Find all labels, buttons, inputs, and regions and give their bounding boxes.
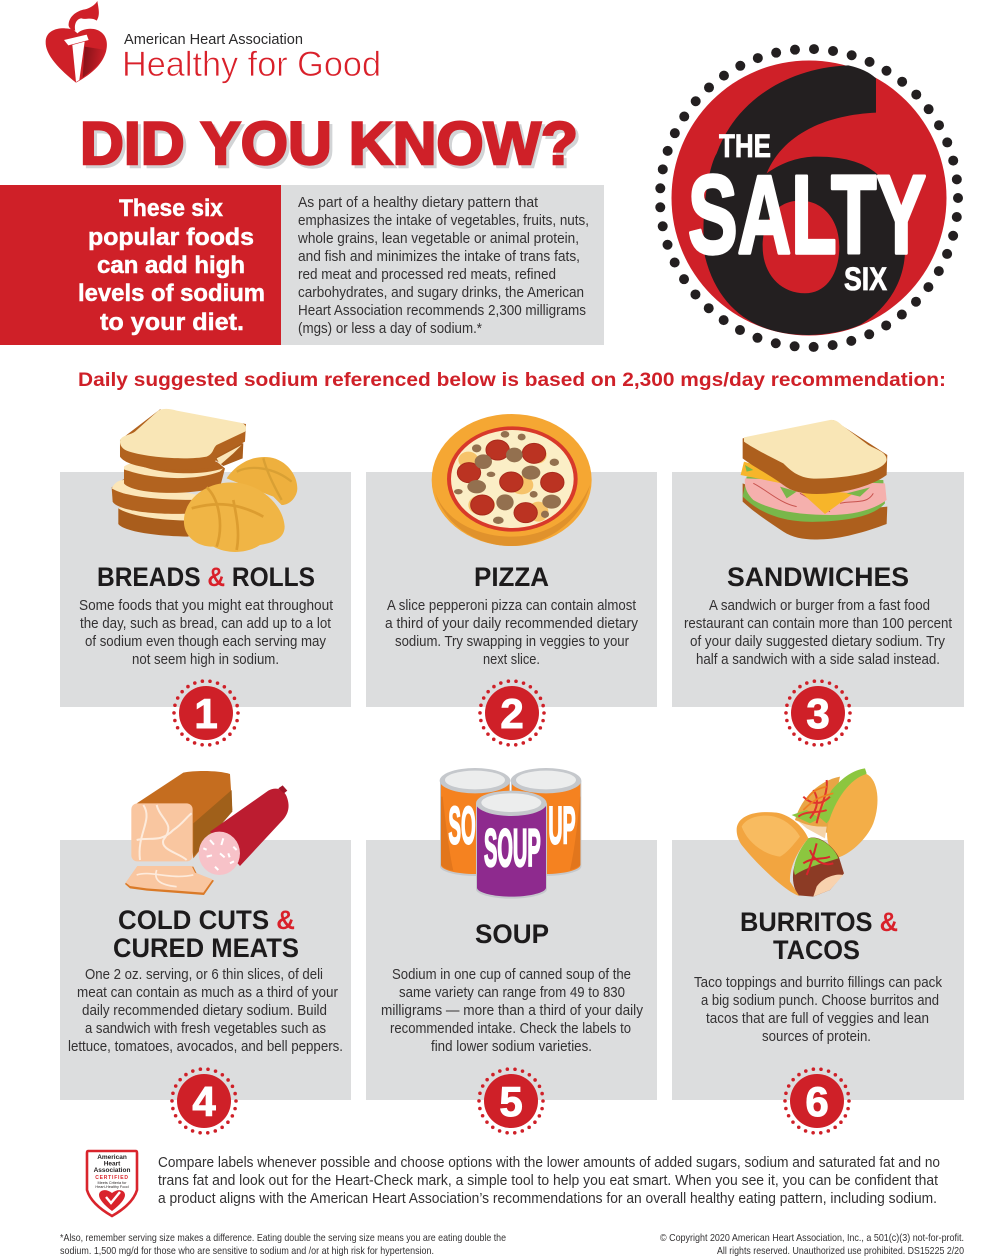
panel: intro text: emphasizes the intake of vegetables, fruits, nuts, bbox=[298, 212, 589, 229]
panel: red callout: to your diet. bbox=[100, 309, 244, 336]
badge: the salty six: SIX bbox=[844, 261, 888, 297]
heading: sandwiches: SANDWICHES bbox=[727, 562, 909, 592]
heading: cold cuts: CURED MEATS bbox=[113, 933, 299, 963]
text: pizza body: sodium. Try swapping in veggies to your bbox=[395, 633, 629, 650]
text: compare labels note: trans fat and look out for the Heart-Check mark, a simple tool to help you eat smart. When you see it, you can be confident that bbox=[158, 1172, 939, 1189]
text: soup body bbox=[381, 966, 643, 1055]
panel: intro text: (mgs) or less a day of sodium.* bbox=[298, 320, 482, 337]
icon: heart-check certification mark: Meets Criteria for bbox=[97, 1181, 127, 1185]
text: compare labels note: Compare labels whenever possible and choose options with the lower amounts of added sugars, sodium and saturated fat and no bbox=[158, 1154, 940, 1171]
text: cold cuts body: One 2 oz. serving, or 6 thin slices, of deli bbox=[85, 966, 323, 983]
panel: intro text: and fish and minimizes the intake of trans fats, bbox=[298, 248, 580, 265]
text: footnote bbox=[60, 1232, 506, 1257]
illustration: burrito and taco bbox=[737, 768, 877, 897]
heading: burritos and tacos: TACOS bbox=[773, 935, 860, 965]
icon: heart-check certification mark bbox=[87, 1151, 137, 1216]
text: copyright bbox=[660, 1232, 964, 1257]
text: burritos body: a big sodium punch. Choose burritos and bbox=[701, 992, 939, 1009]
text: sandwiches body: restaurant can contain more than 100 percent bbox=[684, 615, 953, 632]
text: breads body: of sodium even though each serving may bbox=[85, 633, 326, 650]
text: soup body: milligrams — more than a third of your daily bbox=[381, 1002, 643, 1019]
heading: pizza: PIZZA bbox=[474, 562, 549, 592]
panel: sandwiches bbox=[672, 472, 964, 707]
heading: burritos and tacos bbox=[740, 907, 898, 965]
text: breads body: Some foods that you might eat throughout bbox=[79, 597, 334, 614]
text: cold cuts body: lettuce, tomatoes, avocados, and bell peppers. bbox=[68, 1038, 343, 1055]
icon: heart-check certification mark: American bbox=[97, 1154, 127, 1161]
panel: red callout: popular foods bbox=[88, 224, 254, 251]
text: sandwiches body: A sandwich or burger from a fast food bbox=[709, 597, 930, 614]
text: burritos body bbox=[694, 974, 942, 1045]
text: burritos body: tacos that are full of veggies and lean bbox=[706, 1010, 929, 1027]
text: compare labels note: a product aligns with the American Heart Association’s recommendations for an overall healthy eating pattern, including sodium. bbox=[158, 1190, 937, 1207]
text: soup body: recommended intake. Check the labels to bbox=[390, 1020, 631, 1037]
subheading: daily suggested sodium: Daily suggested sodium referenced below is based on 2,300 mgs/day recommendation: bbox=[78, 370, 946, 391]
panel: pizza bbox=[366, 472, 657, 707]
illustration: soup cans: SO bbox=[448, 796, 476, 855]
text: cold cuts body bbox=[68, 966, 343, 1055]
heading: cold cuts bbox=[113, 905, 299, 963]
number badge 1 bbox=[174, 681, 238, 745]
panel: soup bbox=[366, 840, 657, 1100]
text: UP bbox=[548, 796, 576, 855]
text: pizza body bbox=[385, 597, 638, 668]
text: sandwiches body: of your daily suggested dietary sodium. Try bbox=[690, 633, 945, 650]
panel: intro text: As part of a healthy dietary pattern that bbox=[298, 194, 539, 211]
panel: cold cuts and cured meats bbox=[60, 840, 351, 1100]
panel: red callout: levels of sodium bbox=[78, 280, 265, 307]
text: cold cuts body: daily recommended dietary sodium. Build bbox=[82, 1002, 327, 1019]
text: burritos body: Taco toppings and burrito fillings can pack bbox=[694, 974, 942, 991]
number badge 6 bbox=[785, 1069, 849, 1133]
organisation name: American Heart Association bbox=[124, 32, 303, 48]
panel: intro text: Heart Association recommends 2,300 milligrams bbox=[298, 302, 586, 319]
icon: heart-check certification mark: CERTIFIED bbox=[95, 1175, 129, 1181]
illustration: cold cuts and salami bbox=[125, 771, 289, 895]
number badge 2 bbox=[480, 681, 544, 745]
logo: American Heart Association Healthy for Good bbox=[46, 1, 381, 84]
badge: the salty six: THE bbox=[719, 128, 771, 164]
text: soup body: same variety can range from 49 to 830 bbox=[399, 984, 625, 1001]
text: footnote: sodium. 1,500 mg/d for those who are sensitive to sodium and /or at high risk for hypertension. bbox=[60, 1245, 434, 1257]
heading: cold cuts: COLD CUTS & bbox=[118, 905, 295, 935]
tagline: Healthy for Good bbox=[122, 45, 381, 84]
panel: red callout: can add high bbox=[97, 252, 245, 279]
text: pizza body: a third of your daily recommended dietary bbox=[385, 615, 638, 632]
illustration: bread and rolls bbox=[112, 409, 297, 552]
text: pizza body: A slice pepperoni pizza can contain almost bbox=[387, 597, 637, 614]
number badge 5: 5 bbox=[499, 1078, 523, 1125]
text: breads body: the day, such as bread, can add up to a lot bbox=[80, 615, 332, 632]
number badge 3 bbox=[786, 681, 850, 745]
number badge 5 bbox=[479, 1069, 543, 1133]
panel: breads and rolls bbox=[60, 472, 351, 707]
icon: heart-check certification mark: Heart bbox=[104, 1160, 121, 1168]
text: footnote: *Also, remember serving size makes a difference. Eating double the serving size means you are eating double the bbox=[60, 1232, 506, 1244]
heading: soup: SOUP bbox=[475, 919, 549, 949]
text: sandwiches body bbox=[684, 597, 953, 668]
illustration: pepperoni pizza bbox=[432, 414, 592, 546]
heading: breads and rolls: BREADS & ROLLS bbox=[97, 562, 315, 592]
number badge 3: 3 bbox=[806, 690, 830, 737]
number badge 2: 2 bbox=[500, 690, 524, 737]
text: breads body bbox=[79, 597, 334, 668]
number badge 6: 6 bbox=[805, 1078, 829, 1125]
text: breads body: not seem high in sodium. bbox=[132, 651, 279, 668]
text: cold cuts body: a sandwich with fresh vegetables such as bbox=[85, 1020, 326, 1037]
heading: burritos and tacos: BURRITOS & bbox=[740, 907, 898, 937]
text: cold cuts body: meat can contain as much as a third of your bbox=[77, 984, 338, 1001]
number badge 4: 4 bbox=[192, 1078, 216, 1125]
badge: the salty six bbox=[660, 49, 958, 347]
panel: red callout bbox=[0, 185, 281, 345]
panel: red callout: These six bbox=[119, 195, 223, 222]
text: soup body: Sodium in one cup of canned soup of the bbox=[392, 966, 631, 983]
number badge 1: 1 bbox=[194, 690, 218, 737]
heading: did you know: DID YOU KNOW? bbox=[83, 113, 581, 180]
panel: intro text: red meat and processed red meats, refined bbox=[298, 266, 556, 283]
number badge 4 bbox=[172, 1069, 236, 1133]
panel: intro text bbox=[281, 185, 604, 345]
icon: heart and torch bbox=[46, 1, 107, 83]
text: sandwiches body: half a sandwich with a side salad instead. bbox=[696, 651, 940, 668]
text: pizza body: next slice. bbox=[483, 651, 540, 668]
illustration: soup cans bbox=[440, 768, 581, 899]
illustration: soup cans: SOUP bbox=[484, 819, 541, 878]
panel: intro text: carbohydrates, and sugary drinks, the American bbox=[298, 284, 584, 301]
icon: heart-check certification mark: Association bbox=[94, 1167, 130, 1174]
panel: intro text: whole grains, lean vegetable or animal protein, bbox=[297, 230, 579, 247]
panel: burritos and tacos bbox=[672, 840, 964, 1100]
text: burritos body: sources of protein. bbox=[762, 1028, 871, 1045]
illustration: sandwich bbox=[741, 420, 887, 539]
text: soup body: find lower sodium varieties. bbox=[431, 1038, 592, 1055]
text: compare labels note bbox=[158, 1154, 940, 1207]
icon: heart-check certification mark: Heart-Healthy Food bbox=[95, 1185, 129, 1189]
heading: did you know: DID YOU KNOW? bbox=[80, 110, 578, 177]
